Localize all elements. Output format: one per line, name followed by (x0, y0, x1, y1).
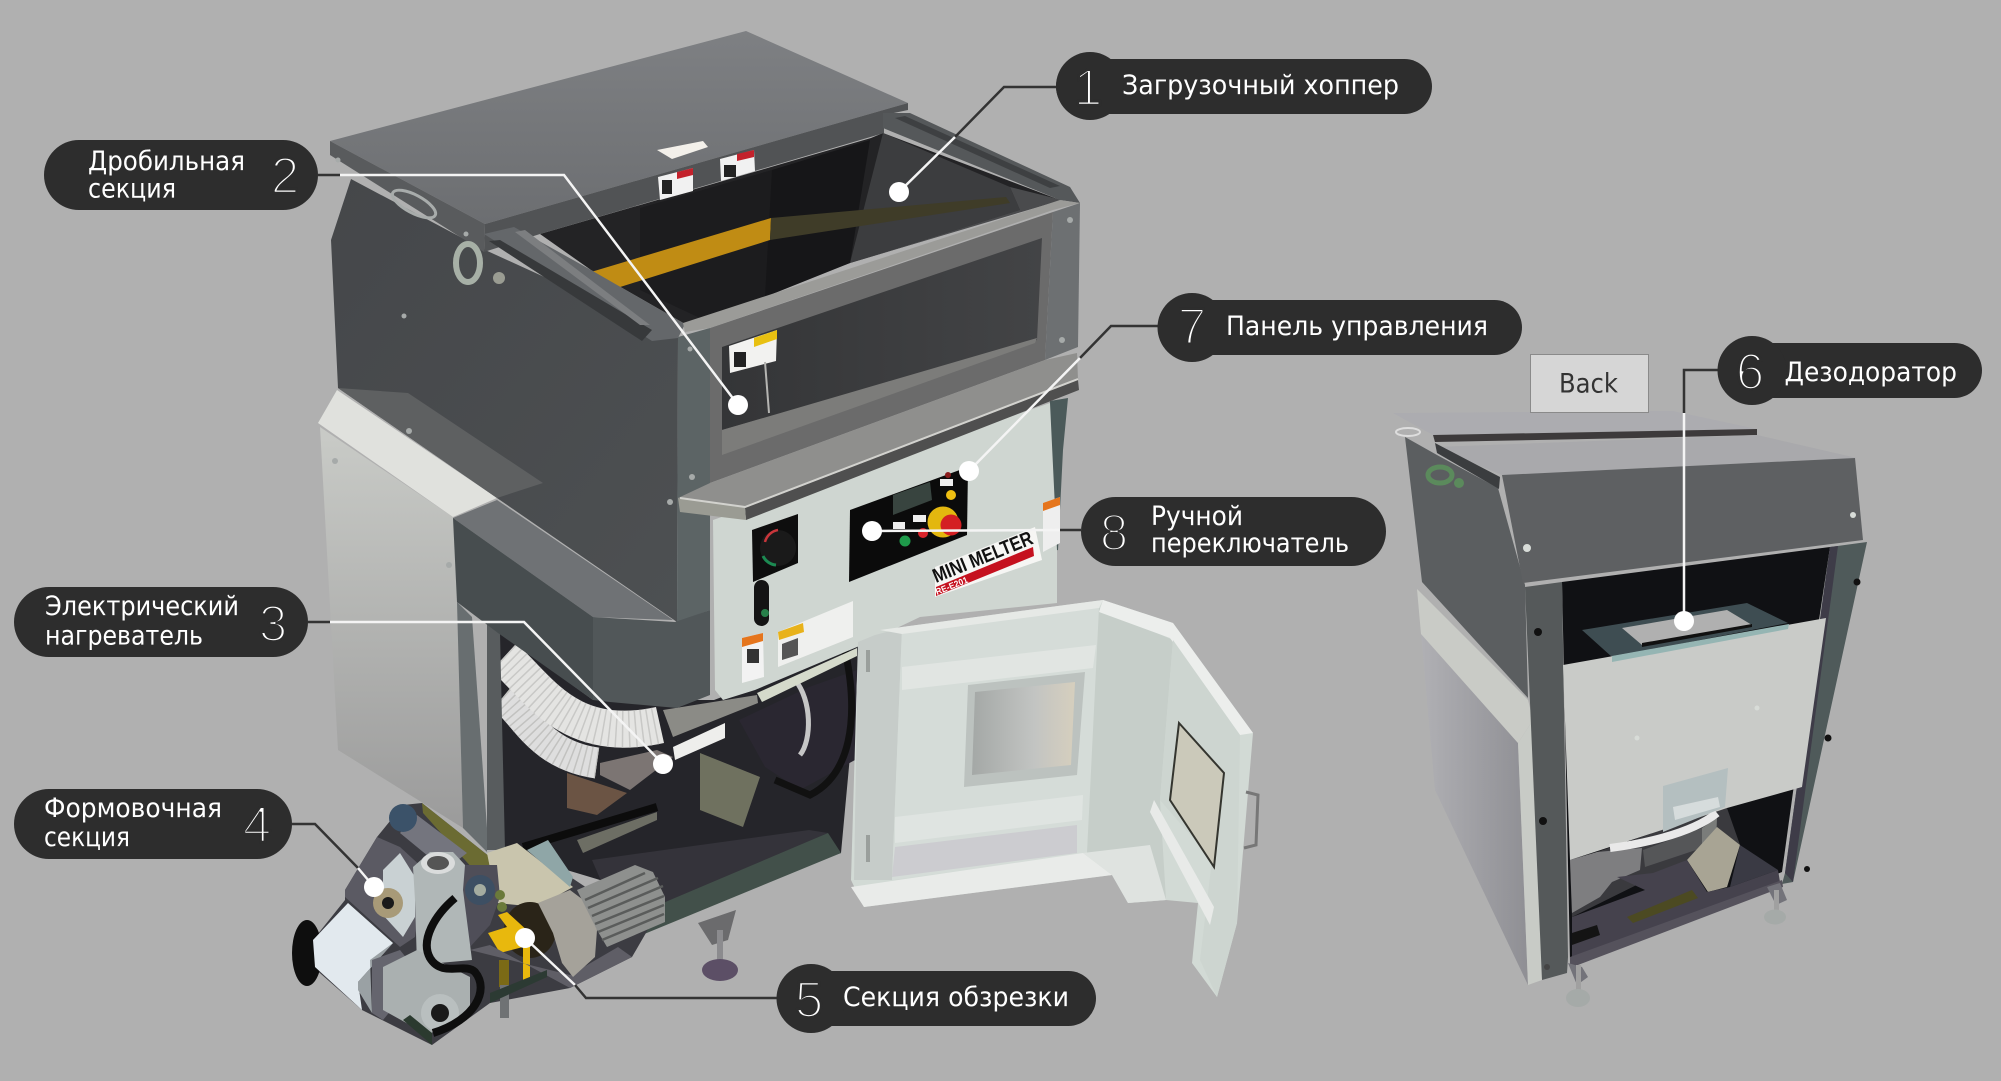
right side strip (1045, 398, 1068, 553)
motor body (413, 852, 472, 965)
label 6 (1718, 336, 1982, 405)
control front panel (713, 403, 1057, 702)
drive base (470, 945, 632, 1003)
rear cavity (1562, 547, 1830, 960)
open cavity (500, 633, 860, 910)
label 8: Ручной (1151, 501, 1243, 532)
electric cylinder (389, 803, 500, 897)
label 7: Панель управления (1226, 311, 1488, 342)
hopper side panel (331, 179, 710, 622)
rear feet (1566, 883, 1787, 1007)
label 3 (14, 587, 308, 657)
white corrugated hoses (503, 657, 660, 763)
control panel box (849, 467, 968, 582)
handle and eye bolt (389, 185, 505, 284)
label 3: Электрический (45, 591, 239, 622)
lower dark block (453, 500, 710, 708)
deodorizer opening (1582, 603, 1788, 657)
right frame plate (440, 865, 500, 950)
open door (851, 600, 1258, 997)
hopper window (683, 200, 1080, 483)
label 1: Загрузочный хоппер (1122, 70, 1399, 101)
label 1 (1056, 52, 1432, 120)
label 5: Секция обзрезки (843, 982, 1069, 1013)
leader line 4 (292, 824, 384, 897)
label 2: 2 (271, 147, 299, 204)
lid (330, 31, 908, 252)
warning stickers (742, 497, 1060, 683)
label 5 (776, 964, 1096, 1033)
label 5: 5 (795, 971, 823, 1028)
rotary switch box (752, 514, 798, 626)
drive motor (577, 865, 665, 947)
rear white panel (1563, 618, 1826, 860)
rear handle and eye bolt (1396, 428, 1464, 488)
leader line 8 (862, 521, 1081, 541)
label 7 (1158, 293, 1522, 362)
rear frame pillars (1525, 542, 1867, 980)
secondary machine, rear view (1393, 411, 1867, 1007)
main machine illustration (292, 31, 1258, 1045)
left frame plate (345, 837, 425, 947)
lower gearbox (383, 950, 470, 1045)
levelling foot (698, 910, 738, 981)
tray and rail (523, 807, 841, 937)
black cable (427, 898, 481, 1033)
rear lower side (1417, 589, 1542, 985)
leader line 3 (308, 622, 673, 774)
label 3: нагреватель (45, 620, 203, 652)
leader line 1 (889, 87, 1056, 202)
leader line 7 (959, 326, 1158, 481)
lower side body panel (318, 390, 497, 828)
Mini Melter nameplate: RE-E201 (934, 575, 969, 597)
label 6: Дезодоратор (1784, 357, 1957, 388)
lid stickers (657, 141, 755, 200)
label 3: 3 (259, 595, 287, 652)
gear cover (538, 890, 597, 977)
rear sloped front (1502, 458, 1863, 583)
label 4: секция (44, 822, 130, 853)
steel heater box and plates (600, 695, 758, 790)
slide rails (484, 113, 1080, 341)
label 4: 4 (243, 796, 271, 853)
label 2: Дробильная (88, 146, 245, 177)
gearbox side (372, 950, 420, 1020)
forming and cutting section (292, 803, 665, 1045)
Mini Melter nameplate (930, 527, 1042, 597)
sprocket and chain (504, 902, 556, 958)
back button (1530, 354, 1648, 412)
motor compartment (1570, 818, 1783, 968)
rear upper side (1405, 437, 1528, 698)
leader line 5 (515, 928, 777, 998)
label 4 (14, 789, 292, 859)
label 4: Формовочная (44, 793, 222, 824)
label 8: 8 (1100, 504, 1128, 561)
label 2: секция (88, 174, 176, 204)
sand panel and teal cover (487, 840, 573, 907)
Mini Melter nameplate: MINI MELTER (930, 527, 1037, 588)
main machine bolts (332, 158, 1073, 568)
black coil and white chute (292, 903, 393, 1013)
bearing (465, 875, 507, 912)
stainless shelf (678, 353, 1079, 520)
label 1: 1 (1074, 59, 1102, 116)
assembly silhouette (313, 803, 665, 1045)
label 6: 6 (1736, 343, 1764, 400)
label 8: переключатель (1151, 528, 1349, 559)
label 8 (1081, 497, 1386, 566)
label 7: 7 (1178, 298, 1206, 355)
rear machine bolts (1523, 512, 1860, 970)
label 2 (44, 140, 318, 210)
back button: Back (1559, 368, 1618, 400)
leader line 6 (1674, 370, 1718, 631)
rear lid (1393, 411, 1857, 489)
yellow bracket (488, 912, 530, 1018)
frame strips (457, 602, 505, 852)
leader line 2 (318, 175, 748, 415)
hopper interior (540, 133, 1062, 324)
